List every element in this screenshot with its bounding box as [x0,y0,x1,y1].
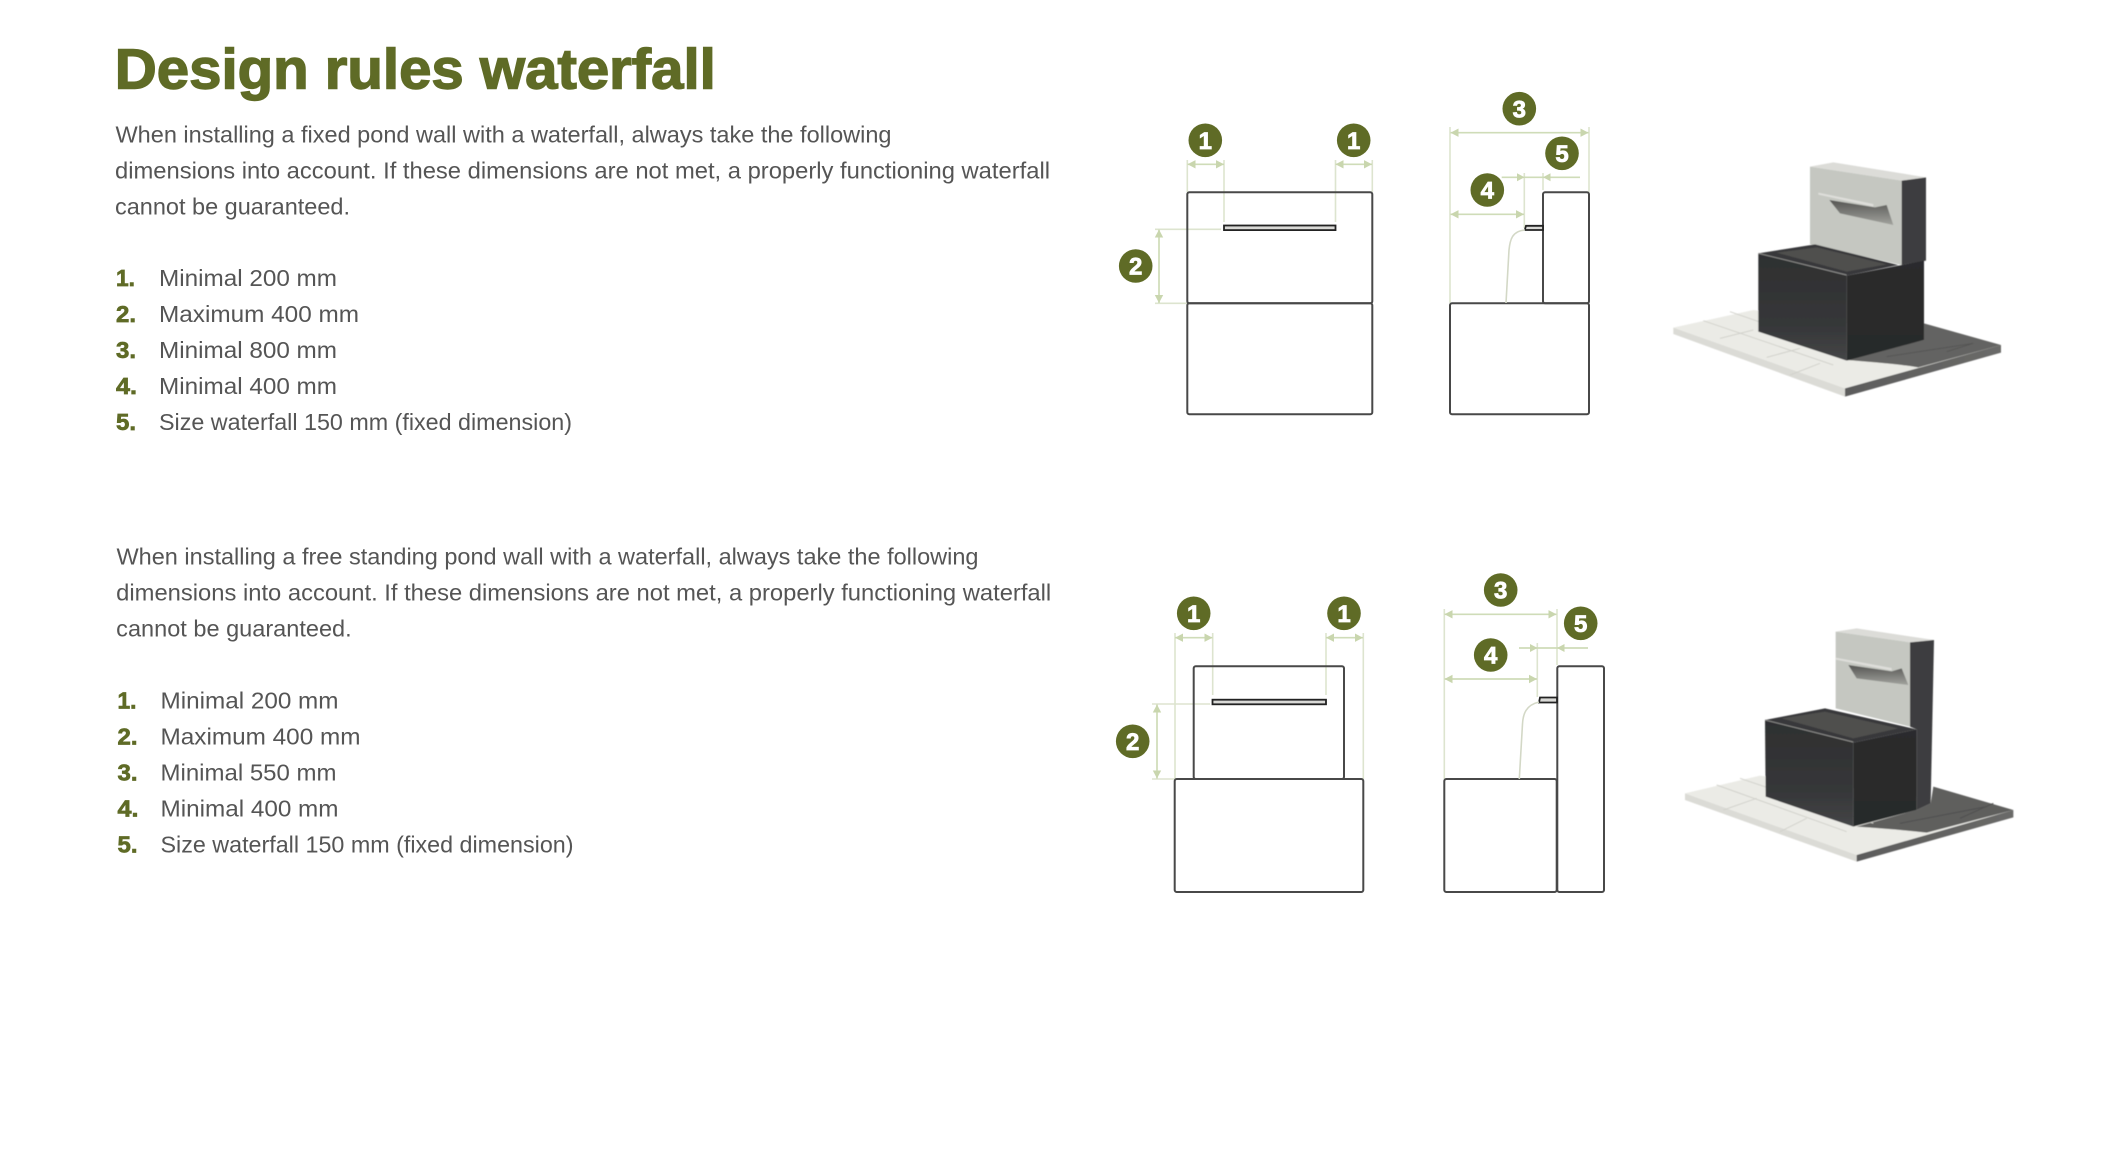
diagram: free standing wall front view: 1 [1337,601,1351,628]
list: free standing pond wall dimensions: 5. [118,831,138,857]
list: fixed pond wall dimensions: Minimal 200 mm [159,265,337,291]
diagram: fixed wall front view: 1 [1199,128,1212,155]
diagram: fixed wall front view: 2 [1129,254,1142,281]
diagram: fixed wall side view: 3 [1513,96,1526,123]
diagram: fixed wall front view [1119,124,1372,414]
text block: free standing pond wall intro: dimensions into account. If these dimensions are not met, a properly functioning waterfall [116,579,1051,605]
diagram: fixed wall side view: 4 [1481,178,1495,205]
diagram: free standing wall side view: 3 [1494,578,1507,605]
list: free standing pond wall dimensions: Minimal 550 mm [160,759,336,785]
list: fixed pond wall dimensions: Minimal 800 mm [159,337,337,363]
list: free standing pond wall dimensions: 1. [118,687,136,713]
diagram: free standing wall side view: 5 [1574,611,1587,638]
diagram: free standing wall front view [1116,596,1363,892]
diagram: free standing wall side view: 4 [1484,643,1498,670]
list: free standing pond wall dimensions: 3. [118,759,138,785]
title: Design rules waterfall [115,37,716,101]
diagram: free standing wall side view [1444,573,1604,892]
list: free standing pond wall dimensions [118,687,574,857]
diagram: free standing wall front view: 1 [1187,601,1200,628]
text block: fixed pond wall intro: When installing a fixed pond wall with a waterfall, always take the following [116,122,892,148]
diagram: fixed wall front view: 1 [1347,128,1360,155]
illustration: fixed pond wall with waterfall [1673,162,2001,397]
list: fixed pond wall dimensions: 5. [116,409,136,435]
list: fixed pond wall dimensions: Maximum 400 mm [159,301,359,327]
text block: fixed pond wall intro: dimensions into account. If these dimensions are not met, a properly functioning waterfall [115,158,1050,184]
diagram: free standing wall front view: 2 [1126,729,1139,756]
text block: free standing pond wall intro: When installing a free standing pond wall with a waterfall, always take the following [116,543,978,569]
list: free standing pond wall dimensions: Size waterfall 150 mm (fixed dimension) [160,831,574,857]
list: free standing pond wall dimensions: 2. [118,723,138,749]
text block: fixed pond wall intro [115,122,1050,220]
list: fixed pond wall dimensions: 3. [116,337,136,363]
list: free standing pond wall dimensions: Minimal 200 mm [160,687,338,713]
illustration: free standing pond wall with waterfall [1685,628,2013,862]
list: fixed pond wall dimensions: 4. [116,373,137,399]
list: free standing pond wall dimensions: Maximum 400 mm [160,723,360,749]
text block: free standing pond wall intro: cannot be guaranteed. [116,615,352,641]
list: fixed pond wall dimensions: 1. [116,265,135,291]
list: fixed pond wall dimensions: Size waterfall 150 mm (fixed dimension) [159,409,572,435]
diagram: fixed wall side view [1450,92,1589,414]
text block: free standing pond wall intro [116,543,1051,641]
list: fixed pond wall dimensions [116,265,572,435]
text block: fixed pond wall intro: cannot be guaranteed. [115,194,350,220]
list: fixed pond wall dimensions: Minimal 400 mm [159,373,337,399]
list: free standing pond wall dimensions: Minimal 400 mm [160,795,338,821]
list: free standing pond wall dimensions: 4. [118,795,138,821]
list: fixed pond wall dimensions: 2. [116,301,136,327]
diagram: fixed wall side view: 5 [1555,141,1569,168]
